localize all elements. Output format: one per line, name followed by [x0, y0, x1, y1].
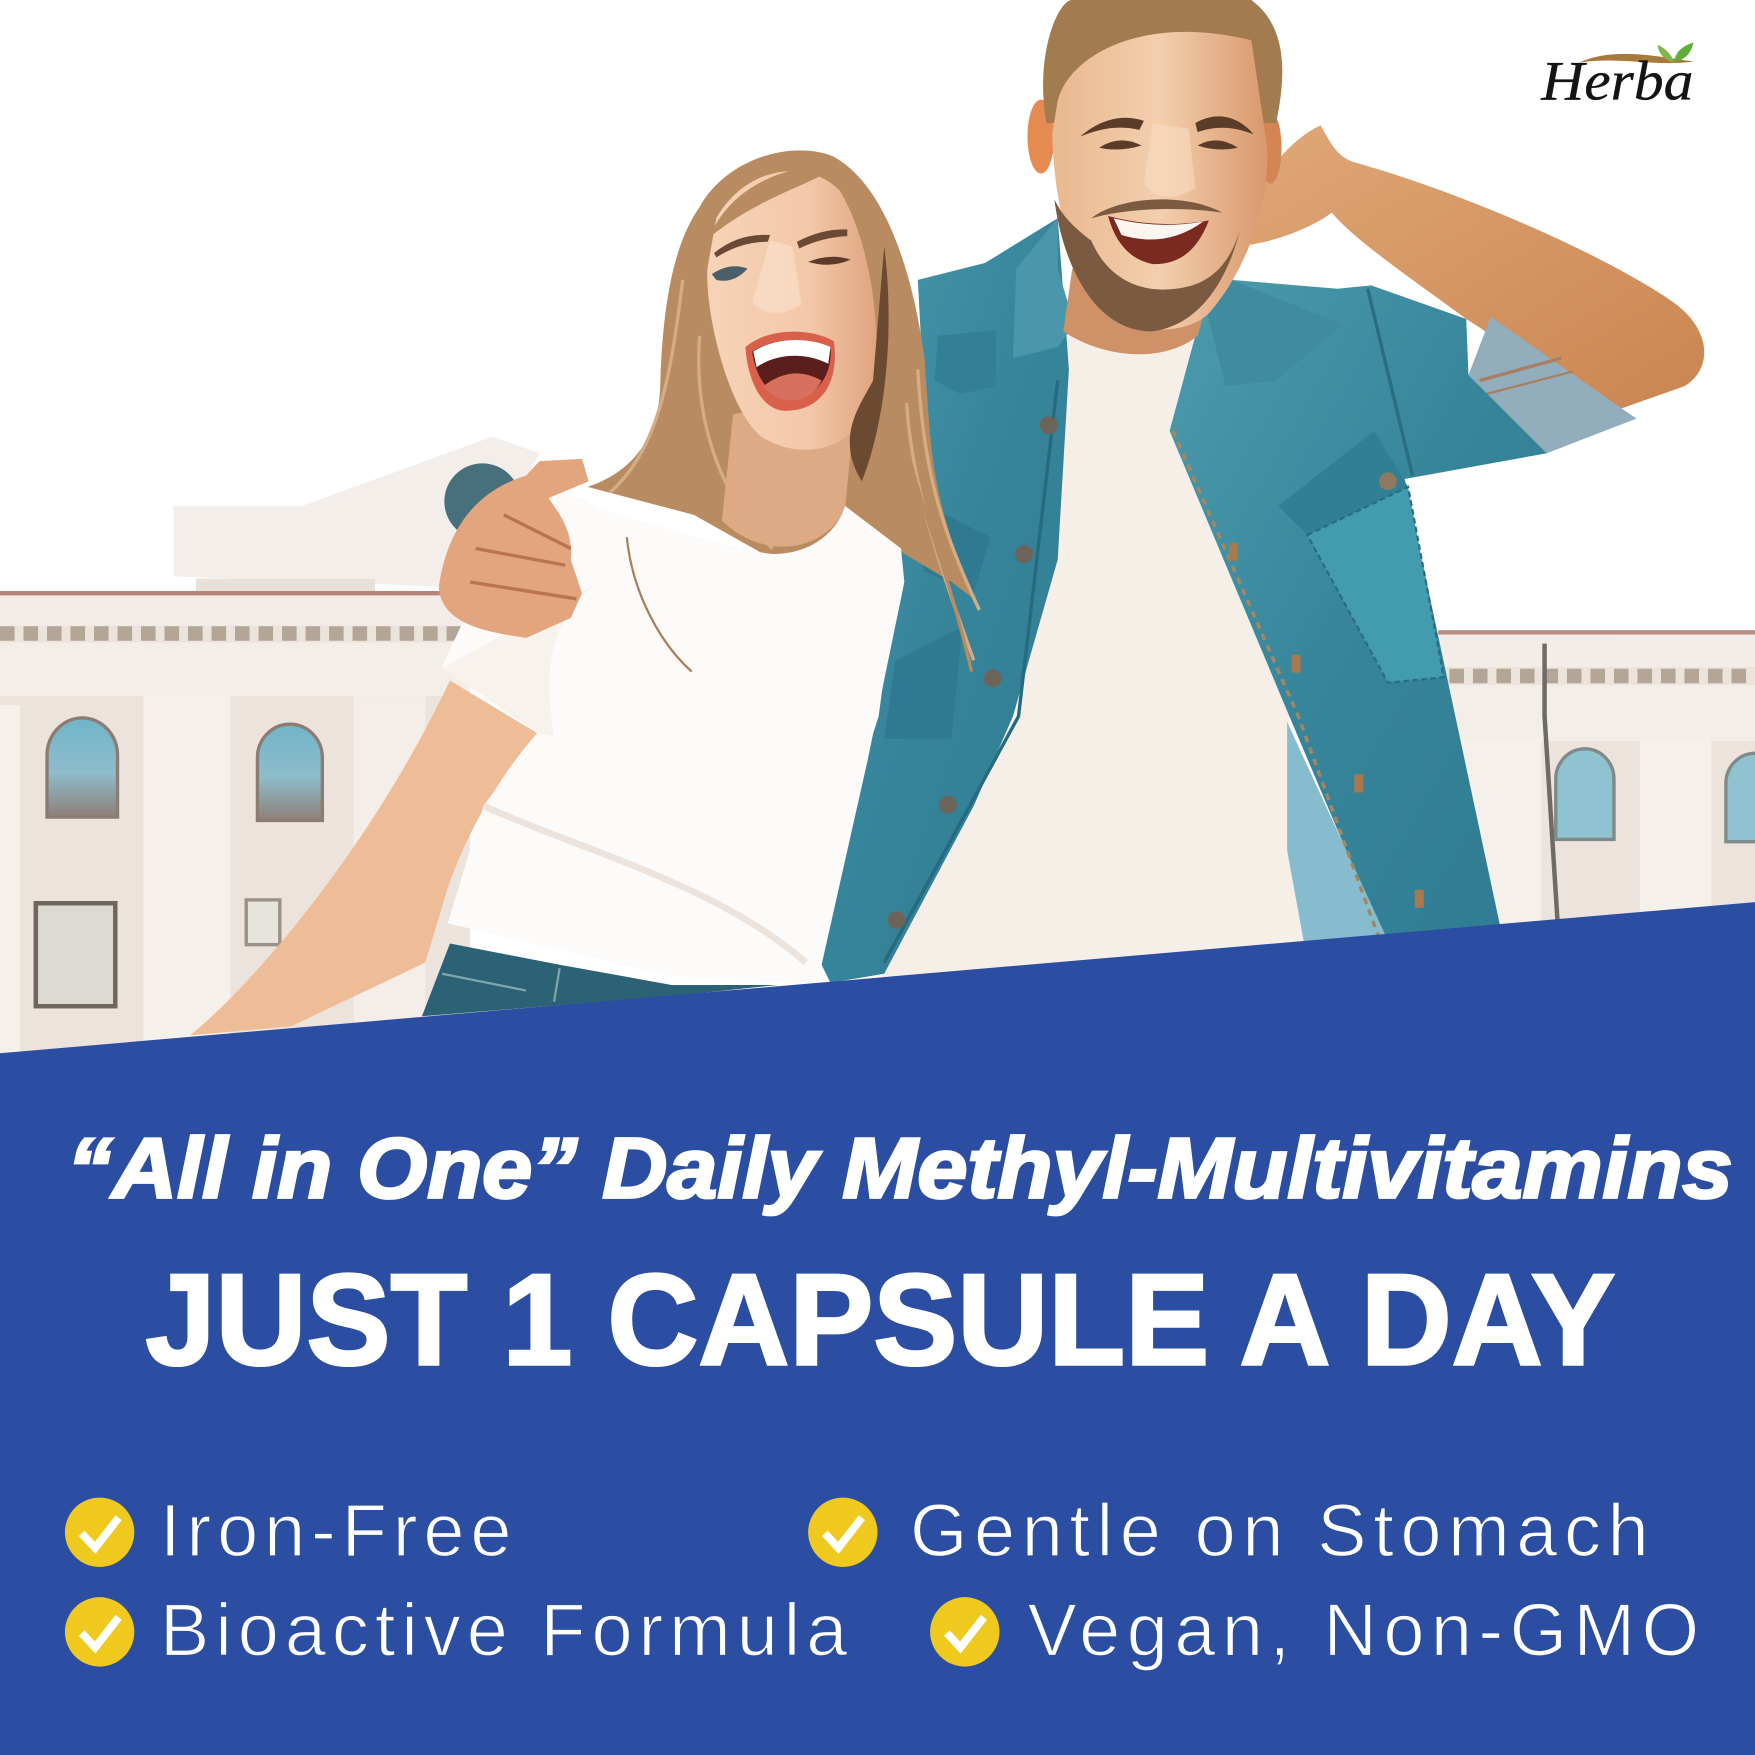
woman: head: [707, 167, 889, 481]
label: vegan non-gmo: Vegan, Non-GMO: [1027, 1588, 1699, 1671]
logo leaves: [1658, 43, 1693, 63]
man: hand on her shoulder: [439, 459, 589, 638]
label: bioactive formula: Bioactive Formula: [160, 1588, 848, 1671]
woman: t-shirt: [442, 492, 904, 985]
icon: check: [65, 1498, 134, 1567]
man: t-shirt: [879, 325, 1307, 983]
woman: open mouth: [745, 332, 835, 411]
man: raised arm: [1231, 125, 1704, 453]
feature: vegan non-gmo: [930, 1588, 1699, 1671]
man: open mouth: [1108, 216, 1209, 264]
heading: all in one: “All in One” Daily Methyl-Multivitamins: [67, 1122, 1733, 1217]
background building: right: [1438, 630, 1755, 963]
background building: left: [0, 437, 539, 1074]
feature: iron-free: [65, 1489, 512, 1572]
feature: gentle on stomach: [808, 1489, 1649, 1572]
heading: just 1 capsule a day: JUST 1 CAPSULE A DAY: [146, 1246, 1615, 1392]
blue diagonal panel: [0, 902, 1755, 1755]
man: head: [1027, 0, 1282, 354]
woman: hair back: [588, 150, 979, 660]
woman: arm: [190, 681, 537, 1035]
woman: jeans: [422, 944, 778, 1016]
icon: check: [930, 1597, 999, 1667]
logo: Herba: [1540, 43, 1693, 113]
label: iron-free: Iron-Free: [160, 1489, 512, 1572]
icon: check: [65, 1597, 134, 1667]
logo swoosh: [1579, 54, 1693, 63]
man: denim jacket: [804, 218, 1547, 983]
logo wordmark: Herba: [1540, 51, 1693, 113]
feature: bioactive formula: [65, 1588, 848, 1671]
woman: neck: [722, 392, 856, 547]
icon: check: [808, 1498, 878, 1567]
label: gentle on stomach: Gentle on Stomach: [910, 1489, 1649, 1572]
